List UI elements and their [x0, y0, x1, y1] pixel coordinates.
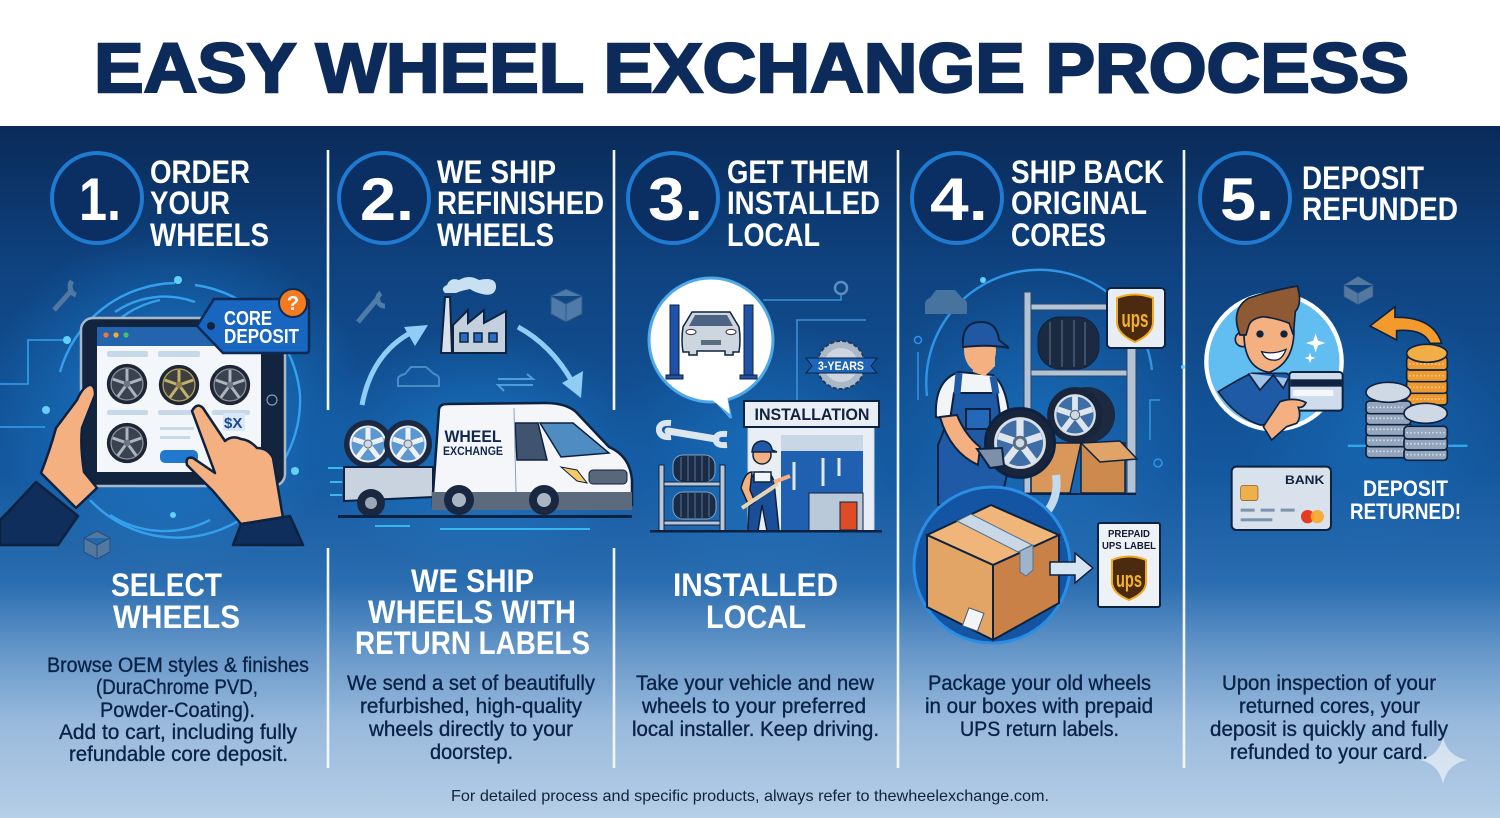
- step 1 subheading: WHEELS: [113, 599, 240, 635]
- step 5 description: Upon inspection of your: [1222, 671, 1436, 695]
- step 2 description: [347, 671, 595, 764]
- icon: delivery van: WHEEL: [444, 427, 502, 446]
- icon: installation shop: [744, 401, 879, 531]
- icon: 3-years warranty badge: [806, 341, 877, 389]
- step 1 heading: YOUR: [150, 185, 230, 221]
- step 5 heading: REFUNDED: [1302, 191, 1458, 227]
- step 1 description: refundable core deposit.: [69, 742, 288, 766]
- callout: car on lift speech bubble: [649, 278, 773, 418]
- icon: prepaid UPS label: [1098, 523, 1160, 607]
- step 2 number badge: 2.: [360, 166, 414, 233]
- icon: mechanic: [741, 441, 790, 531]
- icon: curved arrow: [1030, 475, 1057, 529]
- step 2 heading: [437, 154, 604, 253]
- step 1 description: Add to cart, including fully: [59, 720, 297, 744]
- step 2 heading: REFINISHED: [437, 185, 604, 221]
- panel: step 4 ship back original cores: [912, 153, 1185, 741]
- step 5 number badge: [1200, 153, 1290, 243]
- step 5 description: deposit is quickly and fully: [1210, 717, 1448, 741]
- step 1 heading: ORDER: [150, 154, 250, 190]
- icon: wrench ends: [659, 423, 727, 445]
- step 1 heading: WHEELS: [150, 217, 269, 253]
- step 3 subheading: [673, 567, 838, 635]
- panel: step 5 deposit refunded: [1200, 153, 1468, 764]
- footer note: For detailed process and specific products, always refer to thewheelexchange.com.: [451, 788, 1049, 805]
- step 5 description: refunded to your card.: [1230, 740, 1428, 764]
- step 2 description: doorstep.: [430, 740, 513, 764]
- step 3 subheading: INSTALLED: [673, 567, 838, 603]
- step 4 heading: [1011, 154, 1164, 253]
- step 1 description: Browse OEM styles & finishes: [47, 653, 309, 677]
- step 2 description: We send a set of beautifully: [347, 671, 595, 695]
- icon: 3-years warranty badge: 3-YEARS: [818, 359, 864, 373]
- tablet body: [81, 318, 285, 486]
- step 1 description: Powder-Coating).: [100, 698, 255, 722]
- step 2 number badge: [339, 153, 429, 243]
- icon: bank card: [1232, 467, 1331, 530]
- step 4 heading: ORIGINAL: [1011, 185, 1147, 221]
- icon: gold coin stack: [1407, 344, 1447, 405]
- icon: faded car: [925, 290, 967, 314]
- step 1 number badge: [52, 153, 142, 243]
- step 2 subheading: [355, 563, 590, 661]
- callout: core deposit tag: ?: [287, 293, 299, 315]
- icon: worker holding wheel: [936, 322, 1055, 505]
- step 1 subheading: SELECT: [111, 567, 222, 603]
- icon: prepaid UPS label: UPS LABEL: [1102, 540, 1157, 552]
- icon: delivery van: [338, 403, 632, 518]
- icon: faded wrench: [358, 293, 385, 322]
- icon: faded box: [1344, 276, 1373, 305]
- step 4 heading: CORES: [1011, 217, 1106, 253]
- step 4 description: [925, 671, 1153, 741]
- icon: faded wrench: [54, 281, 76, 310]
- icon: sparkle: [1420, 737, 1467, 784]
- icon: orange return arrow: [1370, 307, 1442, 343]
- callout: deposit returned: [1350, 476, 1461, 524]
- step 2 heading: WE SHIP: [437, 154, 556, 190]
- step 4 description: UPS return labels.: [960, 717, 1119, 741]
- step 2 description: refurbished, high-quality: [360, 694, 582, 718]
- step 1 heading: [150, 154, 269, 253]
- icon: prepaid UPS label: ups: [1116, 567, 1142, 592]
- icon: prepaid UPS label: PREPAID: [1108, 528, 1150, 540]
- icon: faded box: [551, 289, 582, 322]
- icon: faded box: [84, 531, 110, 559]
- callout: core deposit tag: DEPOSIT: [224, 326, 299, 348]
- tablet body: $X: [224, 415, 242, 432]
- callout: core deposit tag: [197, 289, 309, 353]
- callout: deposit returned: DEPOSIT: [1363, 476, 1448, 501]
- panel: step 2 we ship refinished wheels: [328, 153, 632, 764]
- step 1 description: [47, 653, 309, 766]
- step 3 heading: [727, 154, 880, 253]
- illustration: refund: [1206, 276, 1468, 530]
- icon: shelf with tires and box: [914, 270, 1185, 495]
- icon: customer portrait: [1206, 286, 1343, 440]
- step 3 number badge: [628, 153, 718, 243]
- step 4 heading: SHIP BACK: [1011, 154, 1164, 190]
- step 4 number badge: [912, 153, 1002, 243]
- icon: wrench: [668, 431, 716, 439]
- icon: shipping box circle: [914, 487, 1070, 643]
- icon: faded car: [398, 367, 439, 386]
- step 3 number badge: 3.: [648, 166, 703, 233]
- panel: step 1 order your wheels: [0, 153, 309, 766]
- icon: right hand: [187, 406, 303, 545]
- step 2 subheading: WHEELS WITH: [368, 594, 576, 630]
- step 3 heading: LOCAL: [727, 217, 820, 253]
- step 5 description: returned cores, your: [1239, 694, 1420, 718]
- step 1 subheading: [111, 567, 240, 635]
- step 3 heading: INSTALLED: [727, 185, 880, 221]
- icon: delivery van: EXCHANGE: [443, 446, 503, 458]
- step 2 heading: WHEELS: [437, 217, 554, 253]
- step 5 number badge: 5.: [1220, 166, 1274, 233]
- icon: factory with cycle arrows: [328, 277, 590, 529]
- arrow to label: [1050, 553, 1093, 583]
- icon: tablet with hands and core deposit tag: [0, 276, 309, 559]
- icon: installation shop: INSTALLATION: [754, 405, 870, 424]
- icon: tire rack: [659, 455, 725, 531]
- icon: bank card: BANK: [1285, 473, 1325, 487]
- icon: circuit lines: [763, 282, 866, 400]
- step 3 subheading: LOCAL: [706, 599, 806, 635]
- icon: silver coin stacks: [1366, 382, 1447, 460]
- step 5 heading: [1302, 160, 1458, 227]
- step 3 description: local installer. Keep driving.: [632, 717, 879, 741]
- step 2 description: wheels directly to your: [368, 717, 573, 741]
- step 4 description: in our boxes with prepaid: [925, 694, 1153, 718]
- title banner: [0, 0, 1500, 126]
- step 4 description: Package your old wheels: [928, 671, 1151, 695]
- icon: trailer with wheels: [344, 420, 433, 517]
- title banner: EASY WHEEL EXCHANGE PROCESS: [94, 29, 1409, 107]
- step 5 heading: DEPOSIT: [1302, 160, 1424, 196]
- icon: UPS sign: ups: [1122, 306, 1148, 333]
- step 1 number badge: 1.: [79, 166, 121, 233]
- step 3 description: [632, 671, 879, 741]
- step 3 description: wheels to your preferred: [641, 694, 866, 718]
- callout: deposit returned: RETURNED!: [1350, 499, 1461, 524]
- step 1 description: (DuraChrome PVD,: [96, 675, 258, 699]
- icon: left hand: [0, 385, 97, 545]
- callout: core deposit tag: CORE: [224, 308, 272, 330]
- step 2 subheading: WE SHIP: [411, 563, 534, 599]
- step 2 subheading: RETURN LABELS: [355, 625, 590, 661]
- step 3 description: Take your vehicle and new: [636, 671, 874, 695]
- step 5 description: [1210, 671, 1448, 764]
- icon: UPS sign: [1107, 288, 1165, 348]
- panel: step 3 get them installed local: [628, 153, 882, 741]
- step 4 number badge: 4.: [930, 166, 988, 233]
- step 3 heading: GET THEM: [727, 154, 869, 190]
